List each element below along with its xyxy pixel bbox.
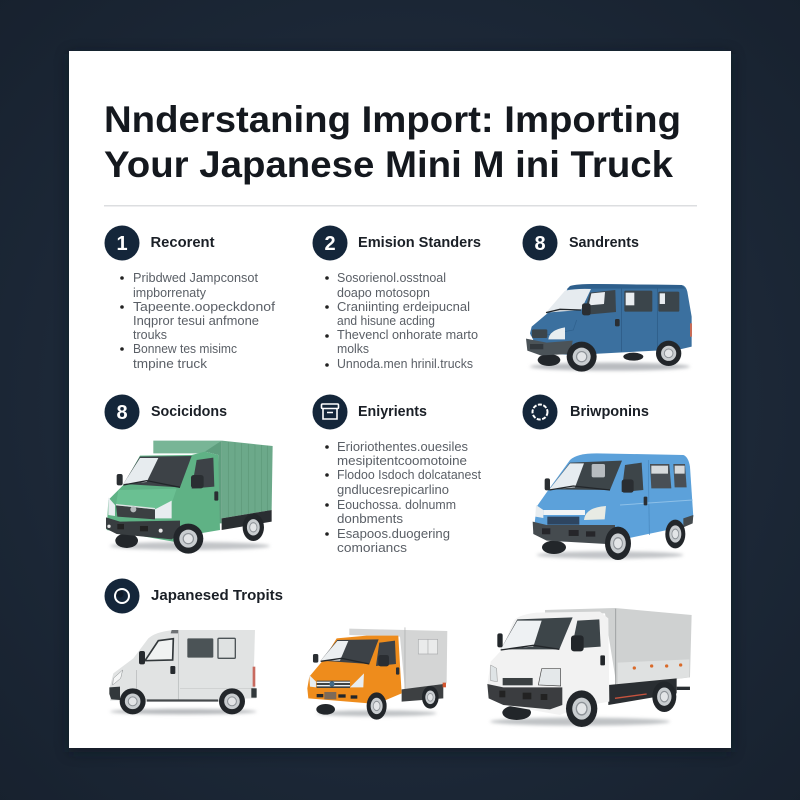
- icon: ring: [104, 578, 140, 614]
- bullet list: Recorent: [120, 271, 276, 371]
- bullet list: Emision Standers: Thevencl onhorate marto: [337, 328, 478, 342]
- icon: number 2: [312, 226, 348, 260]
- bullet list: Eniyrients: donbments: [337, 512, 403, 526]
- bullet list: Eniyrients: Erioriothentes.ouesiles: [337, 440, 468, 454]
- icon: number 1: [104, 226, 140, 260]
- panel: section 2 Emision Standers: [312, 226, 481, 371]
- illustration: white van: [109, 630, 257, 714]
- bullet list: Eniyrients: comoriancs: [337, 541, 407, 555]
- panel: section 1 Recorent: [104, 226, 276, 371]
- heading: Emision Standers: Emision Standers: [358, 234, 481, 251]
- heading: Japanesed Tropits: Japanesed Tropits: [151, 587, 283, 604]
- illustration: green box truck: [106, 441, 273, 554]
- heading: Recorent: Recorent: [150, 234, 214, 251]
- heading: Briwponins: Briwponins: [570, 403, 649, 420]
- icon: number 1: 1: [116, 233, 128, 255]
- panel: section 3 Sandrents: [522, 226, 692, 372]
- bullet list: Recorent: Bonnew tes misimc: [133, 342, 237, 356]
- bullet list: Eniyrients: Flodoo Isdoch dolcatanest: [337, 468, 482, 482]
- title: Your Japanese Mini M ini Truck: [104, 144, 673, 185]
- panel: section 4 Socicidons: [104, 394, 273, 554]
- bullet list: Eniyrients: gndlucesrepicarlino: [337, 483, 449, 497]
- bullet list: Emision Standers: and hisune acding: [337, 314, 435, 328]
- illustration: light blue van: [533, 453, 693, 560]
- bullet list: Emision Standers: Unnoda.men hrinil.trucks: [337, 357, 473, 371]
- title: [104, 99, 681, 185]
- icon: number 8: [104, 394, 140, 430]
- icon: number 2: 2: [324, 233, 336, 255]
- icon: number 8: 8: [534, 233, 546, 255]
- bullet list: Recorent: Tapeente.oopeckdonof: [133, 300, 276, 314]
- bullet list: Eniyrients: [325, 440, 482, 555]
- icon: archive box: [312, 394, 348, 430]
- heading: Socicidons: Socicidons: [151, 403, 227, 420]
- bullet list: Recorent: tmpine truck: [133, 357, 208, 371]
- panel: section 6 Briwponins: [522, 394, 693, 560]
- bullet list: Emision Standers: molks: [337, 342, 369, 356]
- panel: section 5 Eniyrients: [312, 394, 482, 555]
- bullet list: Eniyrients: Esapoos.duogering: [337, 527, 450, 541]
- illustration: large white box truck: [487, 608, 692, 727]
- bullet list: Eniyrients: Eouchossa. dolnumm: [337, 498, 456, 512]
- bullet list: Eniyrients: mesipitentcoomotoine: [337, 454, 467, 468]
- heading: Sandrents: Sandrents: [569, 234, 639, 251]
- icon: number 8: 8: [116, 402, 128, 424]
- title: Nnderstaning Import: Importing: [104, 99, 681, 140]
- bullet list: Emision Standers: doapo motosopn: [337, 286, 430, 300]
- panel: white card: [69, 51, 731, 748]
- bullet list: Recorent: Pribdwed Jampconsot: [133, 271, 259, 285]
- bullet list: Emision Standers: Craniinting erdeipucnal: [337, 300, 470, 314]
- bullet list: Recorent: impborrenaty: [133, 286, 207, 300]
- bullet list: Emision Standers: Sosorienol.osstnoal: [337, 271, 446, 285]
- illustration: orange box truck: [307, 627, 447, 720]
- icon: dashed circle: [522, 394, 558, 430]
- panel: section 7 Japanesed Tropits: [104, 578, 283, 614]
- illustration: dark blue van: [526, 284, 692, 372]
- heading: Eniyrients: Eniyrients: [358, 403, 427, 420]
- bullet list: Emision Standers: [325, 271, 478, 371]
- icon: number 8: [522, 226, 558, 260]
- bullet list: Recorent: trouks: [133, 328, 167, 342]
- bullet list: Recorent: Inqpror tesui anfmone: [133, 314, 259, 328]
